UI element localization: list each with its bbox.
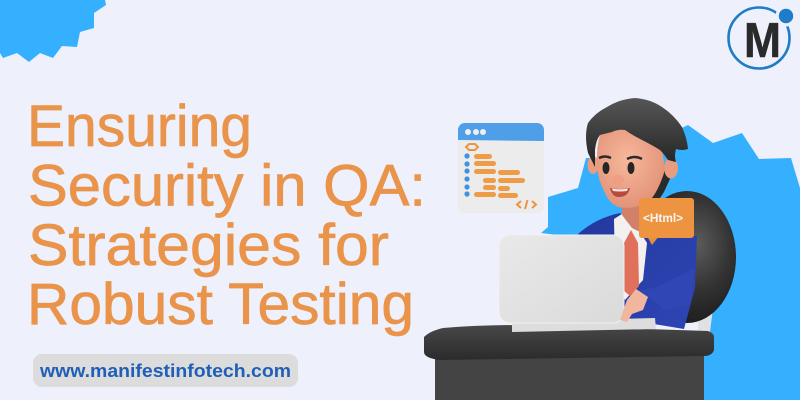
title: Robust Testing xyxy=(27,272,414,337)
speech bubble: Html xyxy=(639,198,694,245)
desk xyxy=(424,325,714,400)
left eyebrow xyxy=(599,156,611,158)
teeth xyxy=(612,188,628,192)
decorative star burst: behind character xyxy=(541,125,800,400)
right eye xyxy=(628,162,634,174)
laptop xyxy=(499,235,656,332)
jacket xyxy=(578,213,697,329)
website url pill xyxy=(33,354,298,387)
title: Strategies for xyxy=(28,213,389,278)
shirt xyxy=(614,212,647,300)
title xyxy=(27,94,426,337)
character xyxy=(578,98,697,329)
hair xyxy=(586,98,688,167)
hand xyxy=(620,289,648,322)
icon: code window xyxy=(458,123,544,213)
logo xyxy=(728,6,796,68)
chair xyxy=(638,191,736,332)
hair behind neck xyxy=(650,170,674,204)
tie xyxy=(623,230,639,296)
logo: M xyxy=(744,14,781,68)
speech bubble: Html: <Html> xyxy=(643,211,683,225)
left eye xyxy=(602,162,610,174)
title: Ensuring xyxy=(27,94,252,159)
right eyebrow xyxy=(627,157,642,159)
decorative star burst: top left xyxy=(0,0,106,62)
title: Security in QA: xyxy=(28,154,426,218)
mouth xyxy=(610,188,630,197)
right ear xyxy=(664,158,678,178)
neck xyxy=(622,198,652,232)
sleeve xyxy=(637,268,695,310)
face xyxy=(597,128,664,208)
left ear xyxy=(588,156,598,174)
website url pill: www.manifestinfotech.com xyxy=(39,361,291,381)
nose xyxy=(612,175,624,185)
